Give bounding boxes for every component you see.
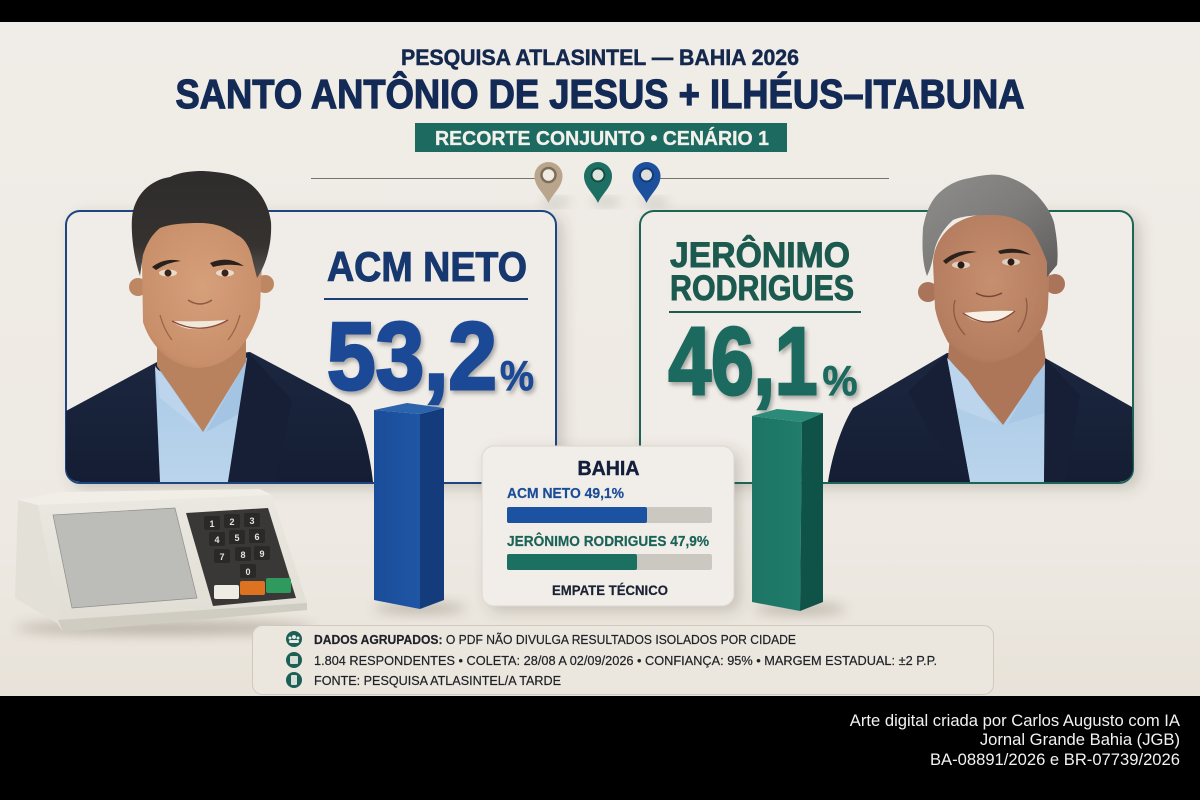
percentage: % <box>500 352 534 399</box>
panel: ACM Neto <box>66 171 556 483</box>
portrait: ACM Neto <box>66 171 373 482</box>
keypad: 5 <box>234 533 240 543</box>
percentage: % <box>822 357 858 404</box>
keypad: 7 <box>219 552 225 562</box>
icon: document <box>286 672 302 688</box>
heading: survey title: SANTO ANTÔNIO DE JESUS + ILHÉUS–ITABUNA <box>176 71 1024 117</box>
row: Jerônimo Rodrigues: JERÔNIMO RODRIGUES 47,9% <box>507 532 709 550</box>
keypad: 4 <box>214 535 220 545</box>
keypad: 8 <box>240 550 246 560</box>
keypad: 6 <box>254 532 260 542</box>
panel: Jerônimo Rodrigues <box>640 175 1133 483</box>
note: source: FONTE: PESQUISA ATLASINTEL/A TARDE <box>314 674 561 688</box>
candidate name: ACM NETO <box>327 243 527 290</box>
row: ACM Neto: ACM NETO 49,1% <box>507 486 624 502</box>
keypad: 2 <box>229 517 235 527</box>
credit caption: BA-08891/2026 e BR-07739/2026 <box>930 750 1180 769</box>
keypad: 0 <box>245 567 251 577</box>
panel: methodology notes <box>252 626 994 694</box>
icon: people <box>286 631 302 647</box>
percentage: 46,1 <box>668 308 818 415</box>
credit caption <box>850 711 1181 769</box>
percentage: 53,2 <box>327 303 497 410</box>
keypad <box>186 508 296 606</box>
heading: Bahia: BAHIA <box>578 458 640 480</box>
verdict label: EMPATE TÉCNICO <box>552 582 668 598</box>
panel: Jerônimo Rodrigues: RODRIGUES <box>670 269 854 308</box>
icon: calendar <box>286 652 302 668</box>
credit caption: Arte digital criada por Carlos Augusto com IA <box>850 711 1181 730</box>
bar: ACM Neto 3D column <box>374 403 466 613</box>
icon: electronic voting machine <box>15 489 315 634</box>
panel: Bahia comparison card <box>482 446 734 606</box>
subtitle banner: RECORTE CONJUNTO • CENÁRIO 1 <box>435 127 769 150</box>
subtitle banner <box>415 123 787 152</box>
credit caption: Jornal Grande Bahia (JGB) <box>980 730 1180 749</box>
row: ACM Neto <box>507 486 712 523</box>
candidate name: JERÔNIMO <box>670 235 850 275</box>
keypad: 9 <box>259 549 265 559</box>
heading: survey title: PESQUISA ATLASINTEL — BAHIA 2026 <box>401 45 799 70</box>
note: grouped data: DADOS AGRUPADOS: O PDF NÃO DIVULGA RESULTADOS ISOLADOS POR CIDADE <box>314 633 796 647</box>
row: Jerônimo Rodrigues <box>507 532 712 570</box>
portrait: Jerônimo Rodrigues <box>828 175 1133 482</box>
keypad: 1 <box>209 519 215 529</box>
note: sample details: 1.804 RESPONDENTES • COLETA: 28/08 A 02/09/2026 • CONFIANÇA: 95% • MARGEM ESTADUAL: ±2 P.P. <box>314 654 937 668</box>
keypad: 3 <box>249 516 255 526</box>
screen <box>53 508 197 608</box>
heading: survey title <box>176 45 1024 117</box>
divider with map pins <box>311 162 889 204</box>
bar: Jerônimo Rodrigues 3D column <box>752 409 846 614</box>
